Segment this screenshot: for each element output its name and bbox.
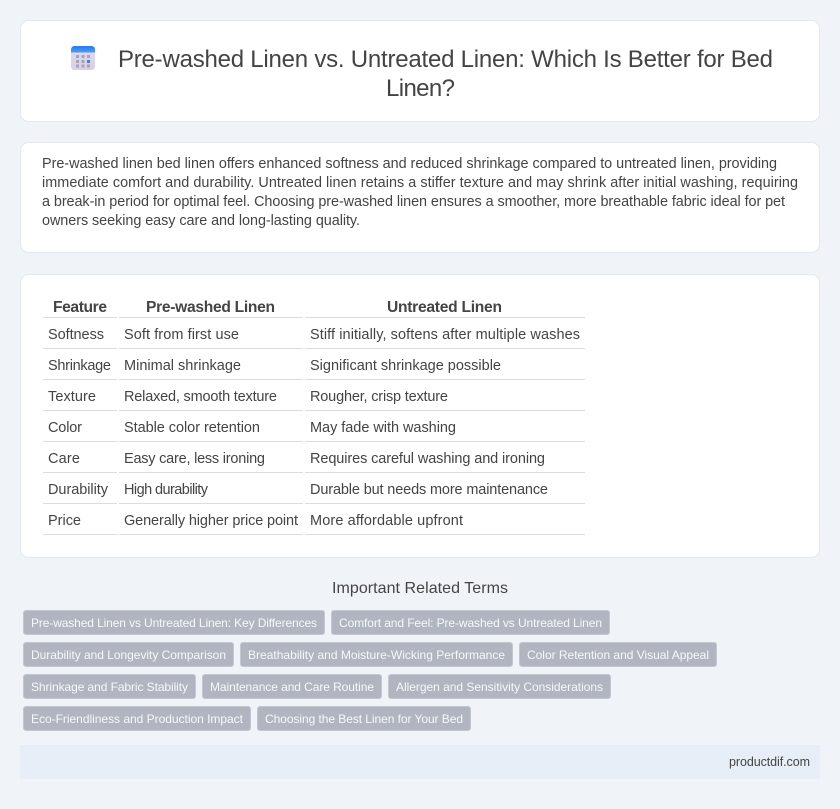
row: care: Care — [48, 451, 80, 467]
panel: title header — [20, 20, 820, 122]
row: softness: Softness — [48, 327, 104, 343]
row: shrinkage — [48, 358, 501, 374]
table header: Feature — [53, 299, 107, 316]
row: shrinkage: Significant shrinkage possible — [310, 358, 501, 374]
text block: summary — [42, 156, 798, 229]
footer: productdif.com — [729, 755, 810, 769]
row: care: Requires careful washing and ironing — [310, 451, 545, 467]
tag — [24, 674, 196, 698]
table header: Untreated Linen — [387, 299, 502, 316]
row: color: Color — [48, 420, 82, 436]
row: color: May fade with washing — [310, 420, 456, 436]
row: shrinkage: Minimal shrinkage — [124, 358, 241, 374]
row: shrinkage: Shrinkage — [48, 358, 111, 374]
row: texture: Relaxed, smooth texture — [124, 389, 277, 405]
tag — [258, 706, 470, 730]
row: price: Price — [48, 513, 81, 529]
related term tags — [24, 610, 716, 730]
heading: related terms: Important Related Terms — [332, 580, 508, 597]
tag: Allergen and Sensitivity Considerations — [396, 680, 603, 694]
tag — [24, 706, 250, 730]
tag: Breathability and Moisture-Wicking Performance — [248, 648, 505, 662]
tag: Choosing the Best Linen for Your Bed — [265, 712, 463, 726]
panel: comparison table — [20, 274, 820, 558]
title — [118, 46, 773, 102]
icon: calendar — [71, 46, 95, 70]
row: softness — [48, 327, 580, 343]
row: price: More affordable upfront — [310, 513, 463, 529]
tag — [332, 610, 610, 634]
table header — [53, 299, 502, 316]
tag — [240, 642, 512, 666]
tag — [388, 674, 610, 698]
row: durability: High durability — [124, 482, 209, 498]
text block: summary: owners seeking easy care and long-lasting quality. — [42, 213, 360, 229]
tag: Pre-washed Linen vs Untreated Linen: Key Differences — [31, 616, 317, 630]
tag: Maintenance and Care Routine — [210, 680, 374, 694]
tag: Color Retention and Visual Appeal — [527, 648, 709, 662]
row: softness: Stiff initially, softens after multiple washes — [310, 327, 580, 343]
text block: summary: a break-in period for optimal feel. Choosing pre-washed linen ensures a smoother, more breathable fabric ideal for pet — [42, 194, 785, 210]
row: texture: Texture — [48, 389, 96, 405]
row: price — [48, 513, 463, 529]
title: Linen? — [386, 75, 455, 102]
tag — [520, 642, 716, 666]
text block: summary: Pre-washed linen bed linen offers enhanced softness and reduced shrinkage compared to untreated linen, providing — [42, 156, 777, 172]
text block: summary: immediate comfort and durability. Untreated linen retains a stiffer texture and may shrink after initial washing, requiring — [42, 175, 798, 191]
row: color: Stable color retention — [124, 420, 260, 436]
tag: Shrinkage and Fabric Stability — [31, 680, 188, 694]
tag: Eco-Friendliness and Production Impact — [31, 712, 244, 726]
title: Pre-washed Linen vs. Untreated Linen: Which Is Better for Bed — [118, 46, 773, 73]
tag: Durability and Longevity Comparison — [31, 648, 226, 662]
table header: Pre-washed Linen — [146, 299, 275, 316]
row: durability — [48, 482, 548, 498]
tag: Comfort and Feel: Pre-washed vs Untreated Linen — [339, 616, 602, 630]
row: care — [48, 451, 545, 467]
footer — [20, 745, 820, 779]
tag — [24, 642, 234, 666]
row: texture: Rougher, crisp texture — [310, 389, 448, 405]
tag — [24, 610, 324, 634]
panel: summary paragraph — [20, 142, 820, 252]
row: color — [48, 420, 456, 436]
row: price: Generally higher price point — [124, 513, 298, 529]
row: softness: Soft from first use — [124, 327, 239, 343]
row: durability: Durable but needs more maintenance — [310, 482, 548, 498]
tag — [202, 674, 382, 698]
row: texture — [48, 389, 448, 405]
row: durability: Durability — [48, 482, 109, 498]
row: care: Easy care, less ironing — [124, 451, 265, 467]
